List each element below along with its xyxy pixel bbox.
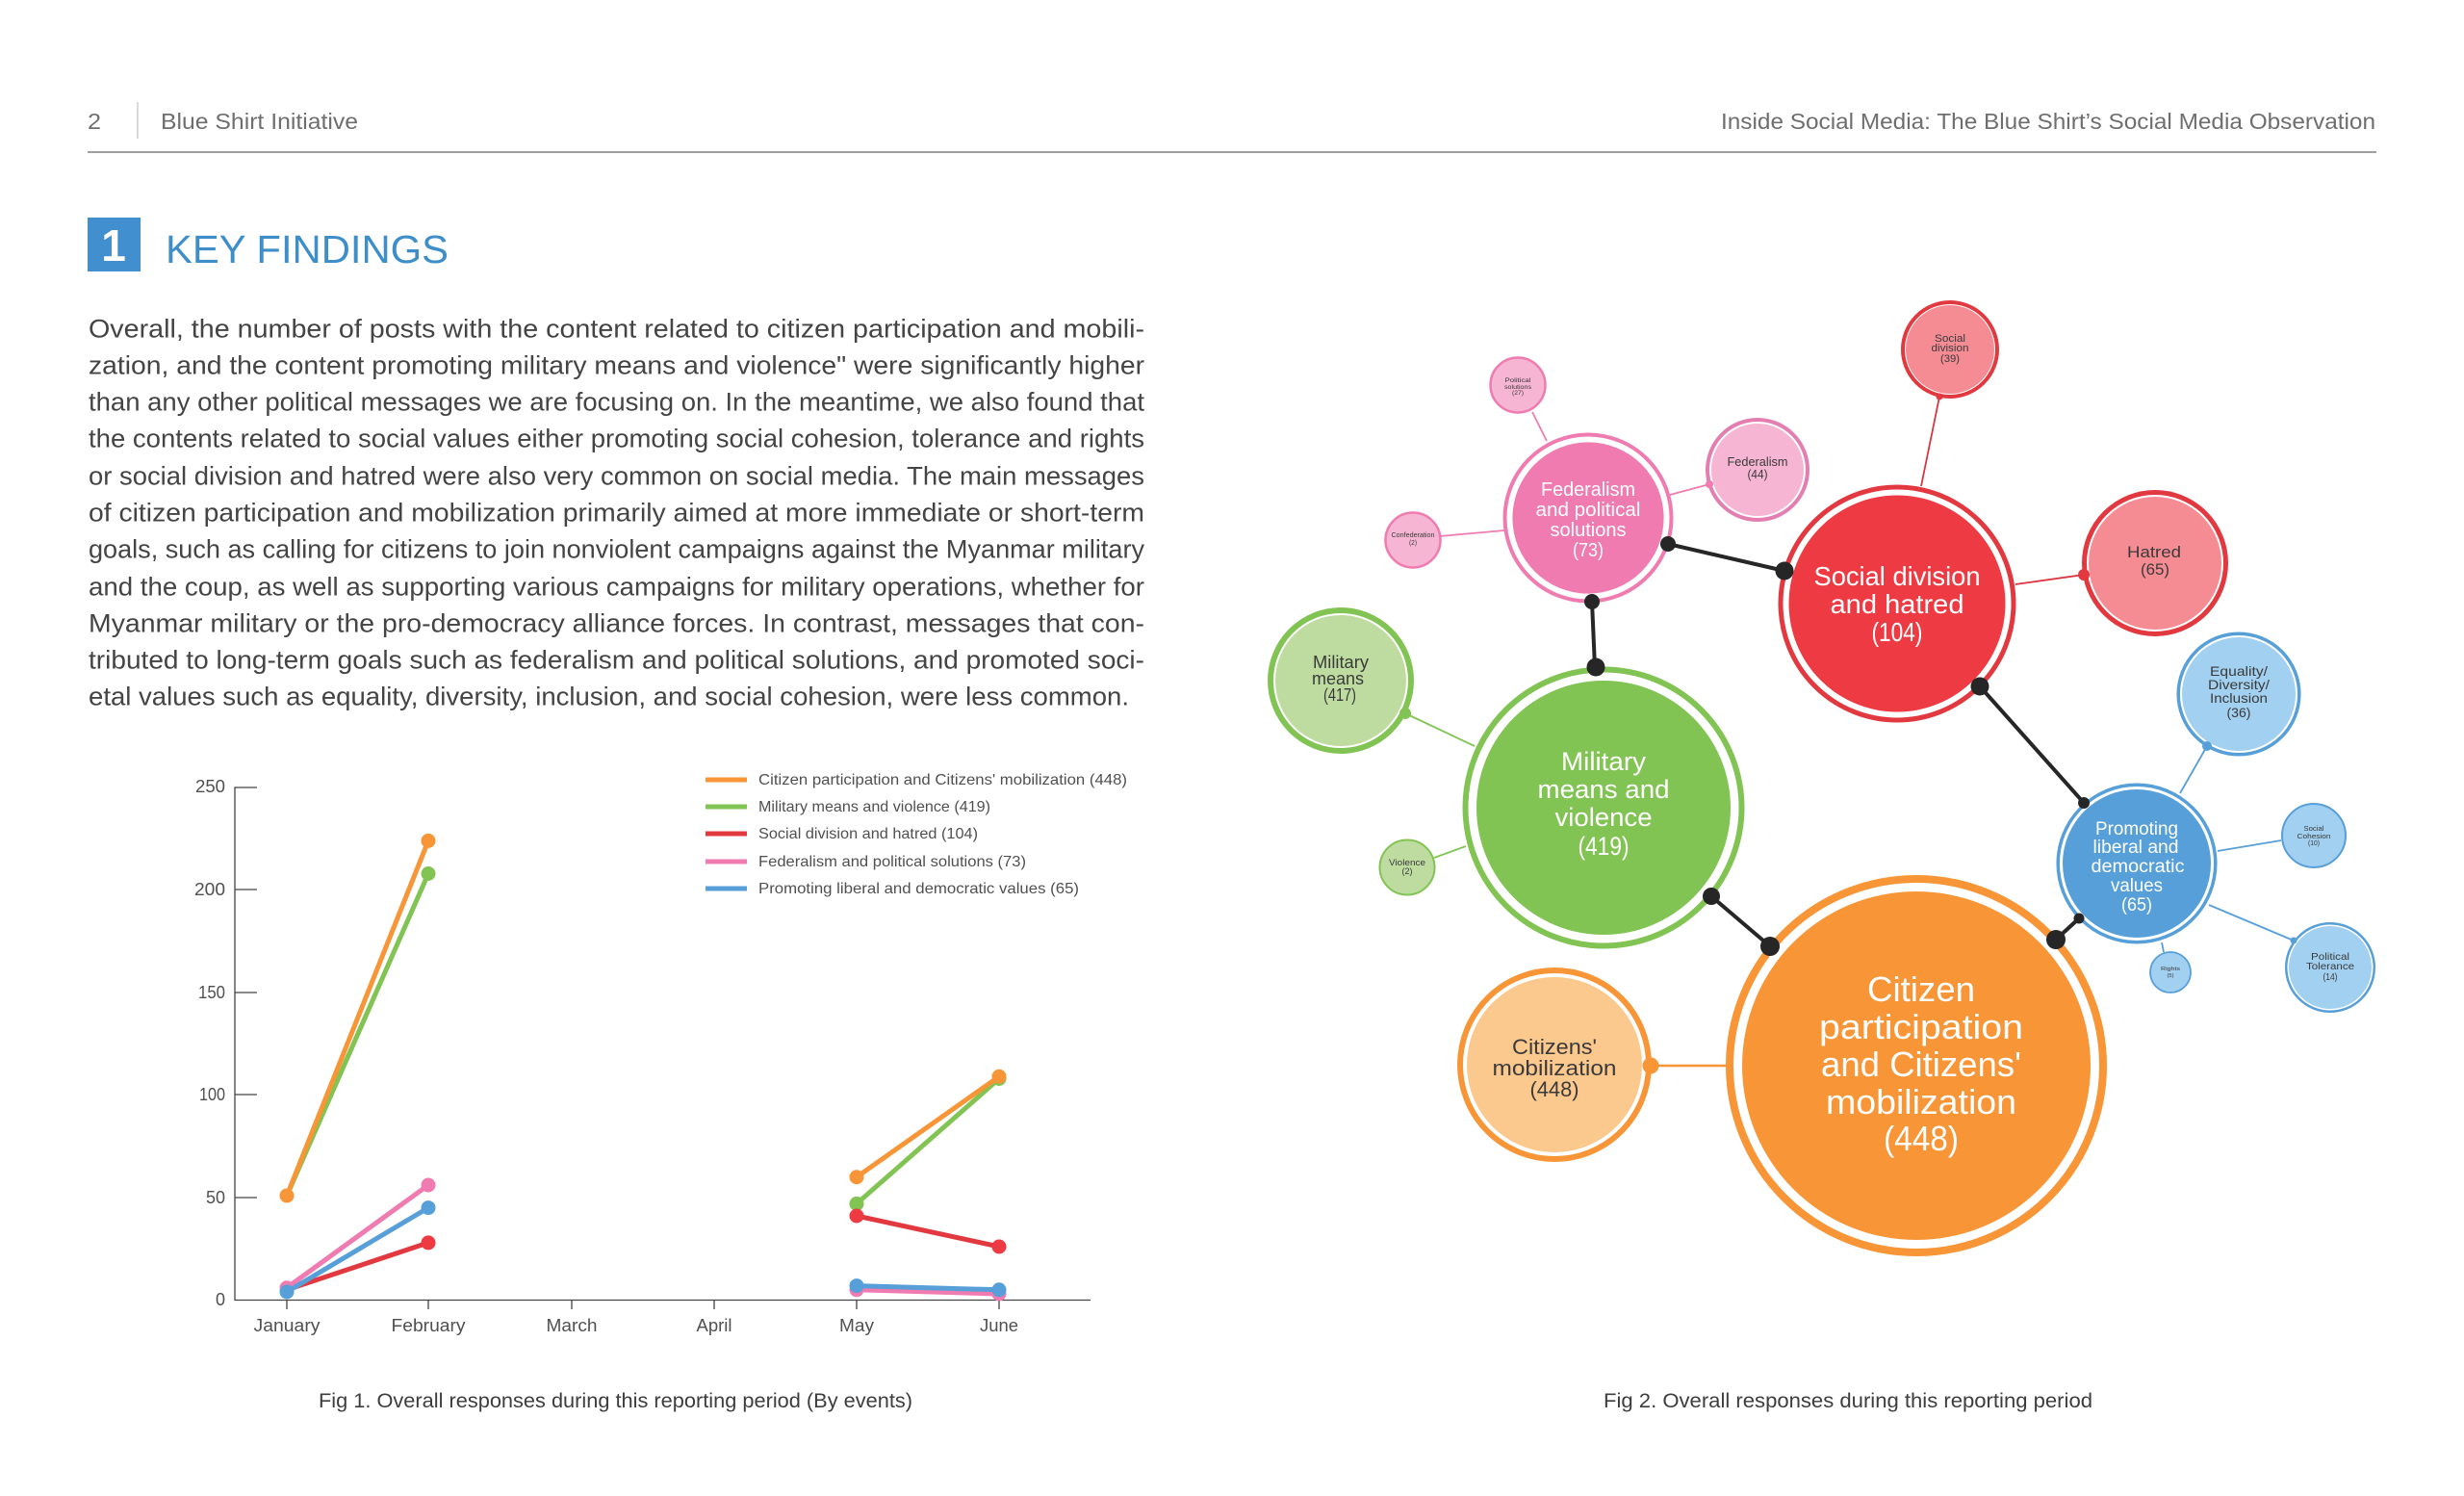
bubble: social cohesion: Cohesion: [2297, 832, 2331, 840]
body paragraph: zation, and the content promoting military means and violence" were significantly higher: [89, 350, 1144, 379]
bubble: political solutions: (27): [1512, 390, 1524, 397]
figure 1 caption: Fig 1. Overall responses during this reporting period (By events): [319, 1390, 912, 1412]
bubble: federalism: [1706, 420, 1808, 520]
body paragraph: of citizen participation and mobilization primarily aimed at more immediate or short-term: [89, 499, 1144, 528]
bubble: social division: [1903, 302, 1997, 400]
bubble: citizen participation: (448): [1884, 1119, 1959, 1158]
bubble: promoting liberal and democratic values: values: [2111, 876, 2163, 896]
bubble: hatred: Hatred: [2127, 543, 2181, 561]
line chart: [194, 772, 1127, 1335]
bubble: military means: Military: [1313, 653, 1369, 672]
bubble: citizen participation: [1730, 879, 2103, 1252]
bubble: promoting liberal and democratic values: Promoting: [2095, 819, 2178, 839]
bubble: social division and hatred: Social division: [1813, 561, 1981, 591]
body paragraph: tributed to long-term goals such as federalism and political solutions, and promoted soci-: [89, 645, 1144, 674]
body paragraph: or social division and hatred were also very common on social media. The main messages: [89, 462, 1144, 491]
bubble: violence: [1380, 839, 1434, 895]
bubble: promoting liberal and democratic values: democratic: [2091, 857, 2185, 877]
heading: KEY FINDINGS: [166, 227, 449, 271]
x axis labels: May: [839, 1316, 874, 1335]
bubble: equality diversity inclusion: Inclusion: [2210, 690, 2268, 706]
bubble: confederation: Confederation: [1392, 532, 1435, 539]
bubble: federalism and political solutions: (73): [1573, 540, 1604, 561]
y axis labels: 50: [206, 1188, 225, 1207]
bubble: hatred: (65): [2141, 560, 2169, 579]
bubble: military means: (417): [1323, 685, 1356, 705]
chart legend: [706, 772, 1127, 897]
bubble: promoting liberal and democratic values: (65): [2121, 895, 2152, 916]
series: federalism and political solutions: [279, 1178, 1007, 1302]
bubble: hatred: [2078, 493, 2225, 633]
series: social division and hatred: [280, 1209, 1007, 1297]
bubble: political solutions: solutions: [1504, 384, 1532, 391]
bubble: rights: (5): [2168, 973, 2174, 979]
black connectors: [1584, 536, 2090, 956]
bubble: violence: (2): [1401, 866, 1413, 876]
bubble: confederation: (2): [1409, 540, 1417, 547]
bubble: political solutions: Political: [1505, 377, 1531, 384]
bubble: social division and hatred: and hatred: [1831, 589, 1964, 619]
bubble: political solutions: [1490, 358, 1546, 412]
series: citizen participation and mobilization: [279, 834, 1007, 1203]
x axis labels: January: [254, 1316, 320, 1335]
bubble: federalism and political solutions: and political: [1536, 500, 1640, 521]
body paragraph: than any other political messages we are focusing on. In the meantime, we also found that: [89, 387, 1144, 416]
bubble: violence: Violence: [1389, 858, 1425, 867]
bubble diagram: [1270, 302, 2374, 1252]
bubble: military means and violence: violence: [1555, 803, 1652, 832]
bubble: rights: Rights: [2161, 967, 2180, 972]
bubble: social cohesion: (10): [2308, 838, 2320, 847]
bubble: military means: [1270, 610, 1411, 751]
chart legend: Military means and violence (419): [758, 799, 990, 815]
x axis labels: February: [391, 1316, 466, 1335]
y axis labels: 250: [195, 777, 225, 796]
chart legend: Federalism and political solutions (73): [758, 854, 1026, 870]
bubble: political tolerance: [2286, 923, 2374, 1012]
bubble: political tolerance: (14): [2323, 971, 2337, 983]
bubble: social division: division: [1931, 343, 1969, 354]
bubble: citizens' mobilization: Citizens': [1512, 1035, 1597, 1059]
body paragraph: etal values such as equality, diversity, inclusion, and social cohesion, were less common.: [89, 682, 1129, 710]
chart legend: Promoting liberal and democratic values (65): [758, 881, 1079, 897]
thin connectors: [1405, 397, 2294, 1066]
body paragraph: goals, such as calling for citizens to join nonviolent campaigns against the Myanmar military: [89, 535, 1144, 564]
bubble: federalism: (44): [1748, 467, 1767, 481]
bubble: citizens' mobilization: (448): [1530, 1077, 1578, 1101]
bubble: citizen participation: mobilization: [1826, 1082, 2016, 1122]
bubble: rights: [2150, 952, 2191, 993]
bubble: social cohesion: Social: [2304, 824, 2324, 833]
header left title: Blue Shirt Initiative: [161, 109, 358, 134]
y axis labels: [194, 777, 225, 1309]
section number badge: 1: [101, 220, 126, 271]
y axis labels: 150: [198, 983, 225, 1002]
section number badge: [88, 218, 141, 271]
bubble: political tolerance: Political: [2311, 951, 2349, 963]
bubble: social division: (39): [1940, 353, 1960, 365]
bubble: citizen participation: Citizen: [1867, 969, 1975, 1009]
bubble: equality diversity inclusion: [2178, 633, 2299, 755]
bubble: federalism and political solutions: solutions: [1550, 520, 1627, 541]
bubble: equality diversity inclusion: Equality/: [2210, 663, 2268, 679]
bubble: military means and violence: [1465, 670, 1742, 945]
bubble: confederation: [1386, 512, 1440, 568]
bubble: promoting liberal and democratic values: liberal and: [2092, 838, 2179, 858]
chart legend: Citizen participation and Citizens' mobilization (448): [758, 772, 1127, 788]
body paragraph: Myanmar military or the pro-democracy alliance forces. In contrast, messages that con-: [89, 608, 1144, 637]
bubble: equality diversity inclusion: (36): [2227, 705, 2250, 720]
x axis labels: [254, 1316, 1018, 1335]
bubble: citizen participation: participation: [1819, 1007, 2023, 1046]
bubble: social cohesion: [2282, 804, 2346, 867]
bubble: political tolerance: Tolerance: [2306, 961, 2354, 972]
y axis labels: 100: [199, 1085, 225, 1104]
bubble: citizen participation: and Citizens': [1821, 1045, 2021, 1084]
y axis labels: 0: [216, 1290, 225, 1309]
bubble: social division and hatred: [1781, 487, 2014, 720]
series: military means and violence: [280, 866, 1007, 1211]
bubble: citizens' mobilization: [1460, 970, 1659, 1159]
bubble: federalism and political solutions: [1505, 435, 1671, 601]
chart axes: [235, 787, 1091, 1309]
bubble: social division and hatred: (104): [1871, 617, 1923, 647]
bubble: social division: Social: [1935, 333, 1965, 345]
x axis labels: March: [547, 1316, 597, 1335]
bubble: military means and violence: Military: [1561, 747, 1647, 776]
chart legend: Social division and hatred (104): [758, 826, 978, 842]
bubble: military means: means: [1312, 669, 1364, 688]
bubble: citizens' mobilization: mobilization: [1492, 1056, 1617, 1080]
page number: 2: [88, 109, 101, 134]
bubble: equality diversity inclusion: Diversity/: [2208, 677, 2270, 692]
x axis labels: April: [697, 1316, 732, 1335]
body paragraph: [89, 314, 1144, 710]
body paragraph: Overall, the number of posts with the content related to citizen participation and mobili-: [89, 314, 1144, 343]
x axis labels: June: [980, 1316, 1018, 1335]
bubble: federalism and political solutions: Federalism: [1541, 479, 1635, 501]
body paragraph: the contents related to social values either promoting social cohesion, tolerance and rights: [89, 424, 1144, 452]
bubble: promoting liberal and democratic values: [2058, 785, 2216, 942]
y axis labels: 200: [194, 880, 225, 899]
header right title: Inside Social Media: The Blue Shirt’s Social Media Observation: [1721, 109, 2375, 134]
bubble: military means and violence: (419): [1578, 832, 1629, 861]
series: promoting liberal and democratic values: [279, 1200, 1007, 1300]
figure 2 caption: Fig 2. Overall responses during this reporting period: [1604, 1390, 2092, 1412]
bubble: military means and violence: means and: [1538, 775, 1669, 804]
body paragraph: and the coup, as well as supporting various campaigns for military operations, whether for: [89, 572, 1144, 601]
bubble: federalism: Federalism: [1727, 454, 1788, 469]
